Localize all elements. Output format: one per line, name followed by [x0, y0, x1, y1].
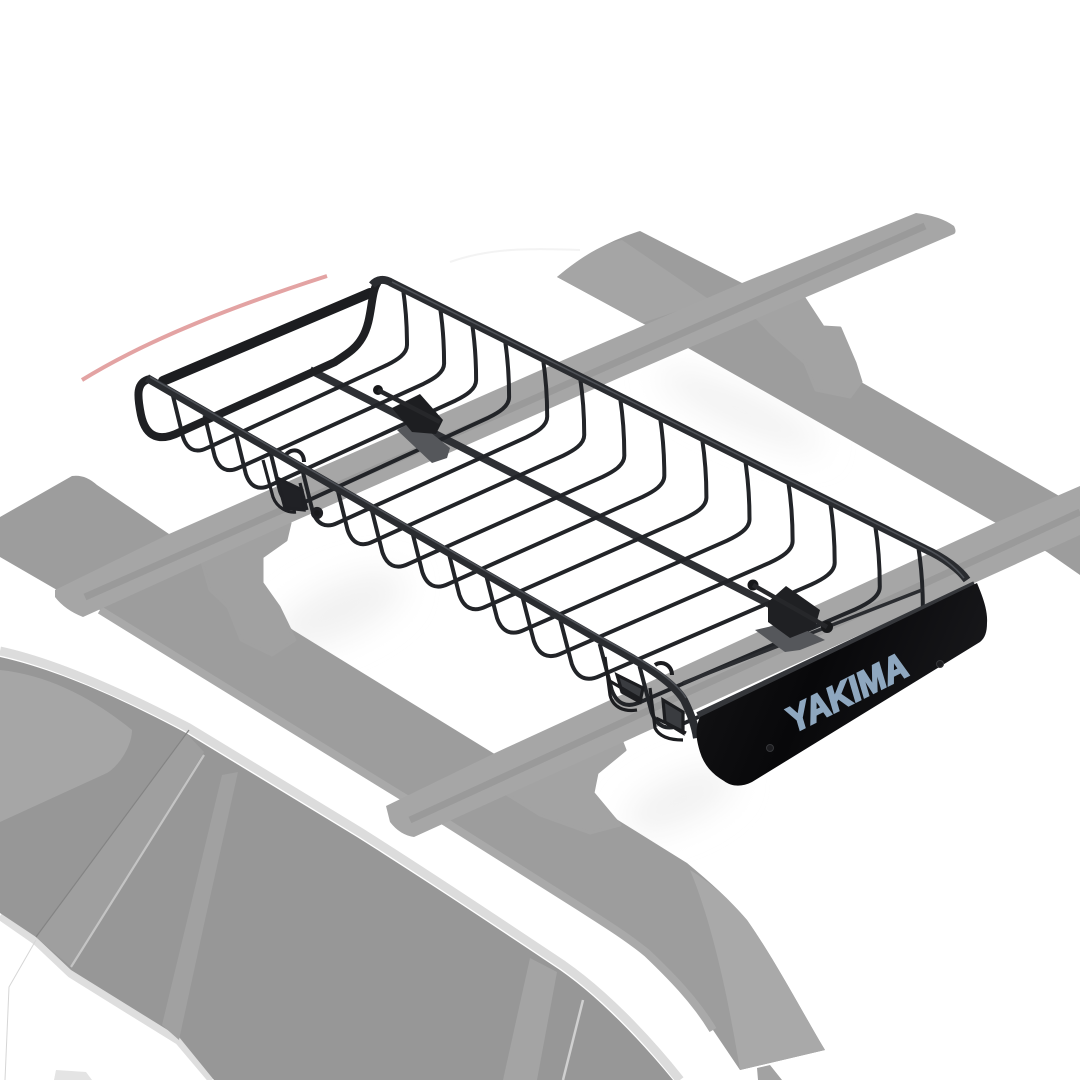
door handle [54, 1070, 92, 1080]
pillar band [36, 733, 204, 967]
fairing screw left [766, 744, 774, 752]
rail lighter panel [557, 240, 710, 323]
roof basket [138, 280, 987, 786]
door seam [5, 940, 36, 1080]
front floor bar [683, 590, 922, 683]
far roof rail [557, 231, 1080, 575]
tail light streak [82, 276, 327, 380]
far tower foot [740, 298, 861, 397]
pillar highlight [71, 755, 204, 967]
faint roof outline [450, 249, 580, 262]
basket spine [310, 370, 775, 607]
soft roof shadows [266, 356, 829, 845]
centre clamp rear [373, 385, 450, 463]
near roof rail [0, 476, 825, 1080]
fairing screw right [936, 660, 944, 668]
front window lighter area [0, 670, 132, 822]
near side rail [147, 377, 697, 738]
near crossbar [386, 486, 1080, 837]
interior seat strip [162, 772, 238, 1040]
side clamp rear [263, 450, 322, 518]
far crossbar [55, 213, 956, 617]
side clamp front [605, 657, 686, 740]
basket wire ribs [173, 289, 923, 728]
car side windows [0, 651, 680, 1080]
far side rail [372, 280, 967, 580]
centre clamp front [748, 580, 833, 652]
second tower foot [500, 737, 625, 833]
wind fairing [697, 583, 987, 786]
pillar seam [36, 730, 189, 937]
rail tail [757, 1065, 782, 1080]
rear pillar band [503, 958, 557, 1080]
window trim [0, 651, 680, 1080]
rail lip [100, 610, 713, 1030]
fender highlight [690, 870, 825, 1070]
rear thick lower bar with end loop [138, 282, 378, 437]
near tower foot [200, 523, 295, 655]
front cross rail [698, 585, 975, 716]
rear thick top bar [163, 293, 370, 381]
fairing logo: YAKIMA [779, 645, 915, 740]
lower trim [0, 916, 212, 1080]
rear window glass highlight [563, 1000, 583, 1080]
glass [0, 657, 673, 1080]
